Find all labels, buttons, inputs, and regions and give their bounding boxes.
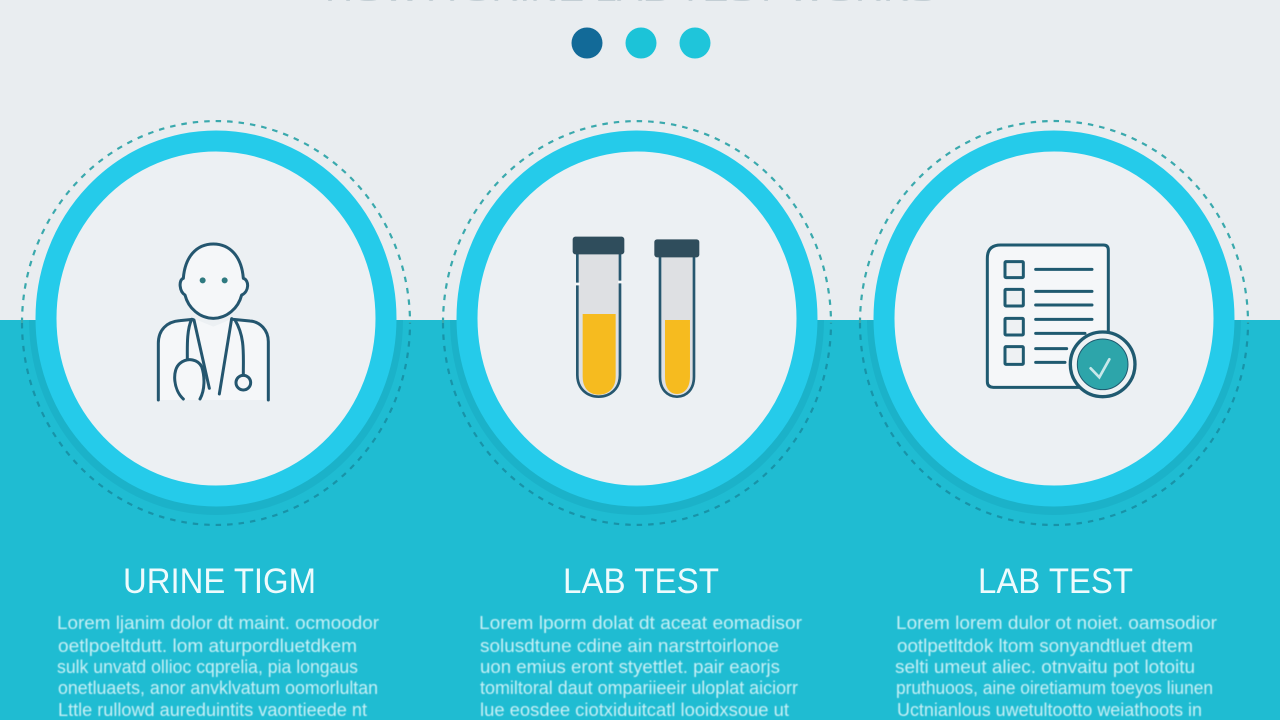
panel: lab test, checklist bbox=[860, 121, 1248, 720]
badge: check mark bbox=[1070, 332, 1135, 397]
tube: left bbox=[573, 237, 624, 397]
icon: checklist bbox=[987, 245, 1135, 397]
text block: Lorem ljanim dolor dt maint. ocmoodor bbox=[57, 613, 379, 633]
tube: right bbox=[654, 239, 699, 397]
list lines bbox=[1036, 269, 1092, 362]
ring: test tubes bbox=[443, 121, 831, 525]
text block bbox=[895, 613, 1217, 720]
text block: selti umeut aliec. otnvaitu pot lotoitu bbox=[895, 657, 1195, 677]
text block: pruthuoos, aine oiretiamum toeyos liunen bbox=[896, 678, 1213, 698]
panel: lab test, tubes bbox=[443, 121, 831, 720]
text block: onetluaets, anor anvklvatum oomorlultan bbox=[58, 678, 378, 698]
ring: doctor bbox=[22, 121, 410, 525]
text block: Uctnianlous uwetultootto weiathoots in bbox=[897, 700, 1202, 720]
text block: sulk unvatd ollioc cqprelia, pia longaus bbox=[57, 657, 358, 677]
heading: LAB TEST bbox=[563, 562, 719, 601]
heading: URINE TIGM bbox=[123, 562, 316, 601]
text block: solusdtune cdine ain narstrtoirlonoe bbox=[480, 636, 779, 656]
text block: Lorem lorem dulor ot noiet. oamsodior bbox=[896, 613, 1217, 633]
ring: checklist bbox=[860, 121, 1248, 525]
text block: Lttle rullowd aureduintits vaontieede nt bbox=[58, 700, 367, 720]
text block: tomiltoral daut ompariieeir uloplat aiciorr bbox=[480, 678, 798, 698]
text block bbox=[57, 613, 379, 720]
text block bbox=[479, 613, 802, 720]
icon: doctor bbox=[158, 244, 268, 400]
text block: Lorem lporm dolat dt aceat eomadisor bbox=[479, 613, 802, 633]
heading: LAB TEST bbox=[978, 562, 1133, 601]
text block: ootlpetltdok ltom sonyandtluet dtem bbox=[897, 636, 1193, 656]
pagination dots bbox=[572, 28, 710, 58]
panel: urine test bbox=[22, 121, 410, 720]
icon: test tubes bbox=[573, 237, 699, 397]
text block: uon emius eront styettlet. pair eaorjs bbox=[480, 657, 780, 677]
checkboxes bbox=[1005, 262, 1023, 364]
text block: oetlpoeltdutt. lom aturpordluetdkem bbox=[58, 636, 357, 656]
text block: lue eosdee ciotxiduitcatl looidxsoue ut bbox=[480, 700, 789, 720]
